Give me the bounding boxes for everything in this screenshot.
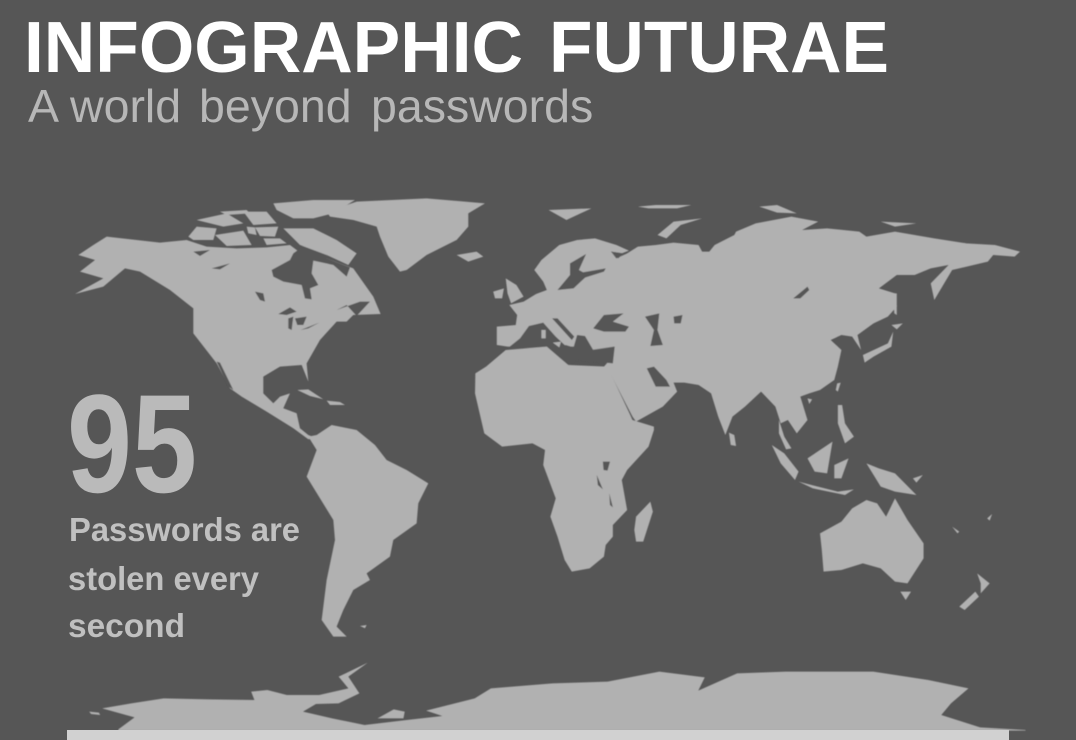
stat description: second bbox=[68, 607, 185, 644]
cuba and hispaniola bbox=[297, 389, 323, 399]
bottom bar bbox=[67, 730, 1009, 740]
stat description: stolen every bbox=[68, 560, 260, 597]
stat callout: 95 passwords bbox=[67, 365, 300, 644]
mediterranean and inland seas bbox=[507, 252, 809, 420]
title: FUTURAE bbox=[549, 8, 889, 88]
stat description: Passwords are bbox=[69, 511, 300, 548]
arctic russian islands bbox=[657, 218, 702, 238]
iceland bbox=[457, 252, 483, 262]
world map bbox=[75, 198, 1026, 731]
subtitle: world bbox=[69, 80, 181, 132]
australia bbox=[820, 498, 924, 583]
title bbox=[24, 8, 889, 88]
arctic islands bbox=[273, 200, 355, 218]
malay peninsula bbox=[779, 420, 791, 449]
uk and ireland bbox=[506, 278, 524, 303]
stat description bbox=[68, 511, 300, 644]
eurasia bbox=[493, 205, 1020, 449]
japan bbox=[863, 332, 893, 363]
great lakes bbox=[193, 250, 370, 390]
hudson bay bbox=[272, 243, 350, 299]
southeast asia islands bbox=[772, 445, 799, 480]
madagascar bbox=[634, 502, 653, 542]
mediterranean islands bbox=[541, 330, 546, 338]
south america bbox=[307, 425, 428, 637]
stat number: 95 bbox=[67, 365, 197, 522]
north america bbox=[75, 198, 485, 439]
subtitle: beyond bbox=[199, 80, 352, 132]
title: INFOGRAPHIC bbox=[24, 8, 523, 88]
greenland bbox=[327, 198, 485, 272]
antarctica bbox=[89, 663, 1026, 731]
new zealand bbox=[977, 573, 990, 593]
africa, australia and oceania bbox=[475, 347, 992, 610]
subtitle: passwords bbox=[371, 80, 593, 132]
subtitle: A bbox=[28, 80, 59, 132]
